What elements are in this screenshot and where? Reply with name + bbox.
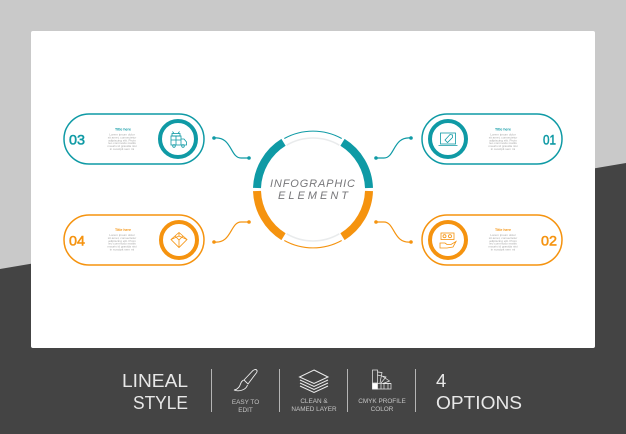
panel: option 02: 02 — [541, 232, 557, 248]
heading: 4 options — [436, 370, 522, 413]
panel: option 01: mauris id gravida nisi — [488, 144, 518, 148]
icon: delivery truck — [171, 132, 186, 147]
connector: 02 to ring — [374, 220, 413, 244]
connector: 03 to ring — [212, 136, 251, 160]
panel: option 03: leo commodo mattis — [108, 141, 136, 145]
label: easy to edit — [232, 399, 259, 414]
icon: stacked layers — [300, 370, 328, 392]
label: clean and named layer: CLEAN & — [300, 398, 328, 405]
label: clean and named layer: NAMED LAYER — [291, 406, 337, 413]
label: clean and named layer — [291, 398, 337, 413]
panel: option 02: Title here — [495, 228, 511, 232]
panel: option 01 — [422, 114, 562, 164]
panel: option 01: sit amet, consectetur — [489, 135, 517, 139]
panel: option 02: adipiscing elit. Proin — [489, 239, 517, 243]
panel: option 01: in suscipit sem mi — [491, 147, 516, 151]
label: easy to edit: EASY TO — [232, 399, 259, 406]
background: dark diagonal — [0, 163, 626, 434]
panel: option 03: adipiscing elit. Proin — [108, 138, 136, 142]
center title: ELEMENT — [278, 190, 349, 202]
heading: 4 options: 4 — [436, 370, 446, 391]
panel: option 02: sit amet, consectetur — [489, 236, 517, 240]
central ring — [257, 131, 369, 248]
panel: option 01: Title here — [495, 128, 511, 132]
panel: option 02 — [422, 215, 562, 265]
panel: option 02: leo commodo mattis — [489, 242, 517, 246]
icon: cmyk swatch fan — [372, 370, 391, 389]
label: cmyk profile color — [358, 398, 406, 413]
panel: option 02: mauris id gravida nisi — [488, 245, 518, 249]
panel: option 03: sit amet, consectetur — [108, 135, 136, 139]
icon: laptop with tag — [438, 133, 458, 146]
panel: option 04 — [64, 215, 204, 265]
heading: 4 options: OPTIONS — [436, 392, 522, 413]
center title — [270, 178, 355, 202]
panel: option 04: adipiscing elit. Proin — [108, 239, 136, 243]
panel: option 04: Title here — [115, 228, 131, 232]
connector: 01 to ring — [374, 136, 413, 160]
panel: option 03: in suscipit sem mi — [110, 147, 135, 151]
icon: hand holding money — [440, 233, 456, 248]
panel: option 01: 01 — [543, 132, 556, 148]
panel: option 03: Title here — [115, 128, 131, 132]
heading: lineal style: LINEAL — [122, 370, 188, 391]
heading: lineal style: STYLE — [133, 392, 188, 413]
panel: option 04: in suscipit sem mi — [110, 248, 135, 252]
panel: option 01: Lorem ipsum dolor — [490, 132, 516, 136]
label: cmyk profile color: CMYK PROFILE — [358, 398, 406, 405]
panel: option 03: 03 — [69, 132, 85, 148]
panel: option 02: Lorem ipsum dolor — [490, 233, 516, 237]
icon: paint brush — [234, 370, 257, 391]
panel: option 02: in suscipit sem mi — [491, 248, 516, 252]
label: cmyk profile color: COLOR — [371, 406, 394, 413]
white card panel — [31, 31, 595, 348]
label: easy to edit: EDIT — [238, 407, 253, 414]
panel: option 03: mauris id gravida nisi — [107, 144, 137, 148]
panel: option 04: 04 — [69, 232, 85, 248]
connector: 04 to ring — [212, 220, 251, 244]
panel: option 01: leo commodo mattis — [489, 141, 517, 145]
panel: option 04: leo commodo mattis — [108, 242, 136, 246]
panel: option 03 — [64, 114, 204, 164]
icon: box — [171, 232, 187, 248]
panel: option 04: mauris id gravida nisi — [107, 245, 137, 249]
panel: option 03: Lorem ipsum dolor — [109, 132, 135, 136]
center title: INFOGRAPHIC — [270, 178, 355, 190]
footer dividers — [212, 369, 416, 412]
panel: option 01: adipiscing elit. Proin — [489, 138, 517, 142]
panel: option 04: sit amet, consectetur — [108, 236, 136, 240]
panel: option 04: Lorem ipsum dolor — [109, 233, 135, 237]
heading: lineal style — [122, 370, 188, 413]
